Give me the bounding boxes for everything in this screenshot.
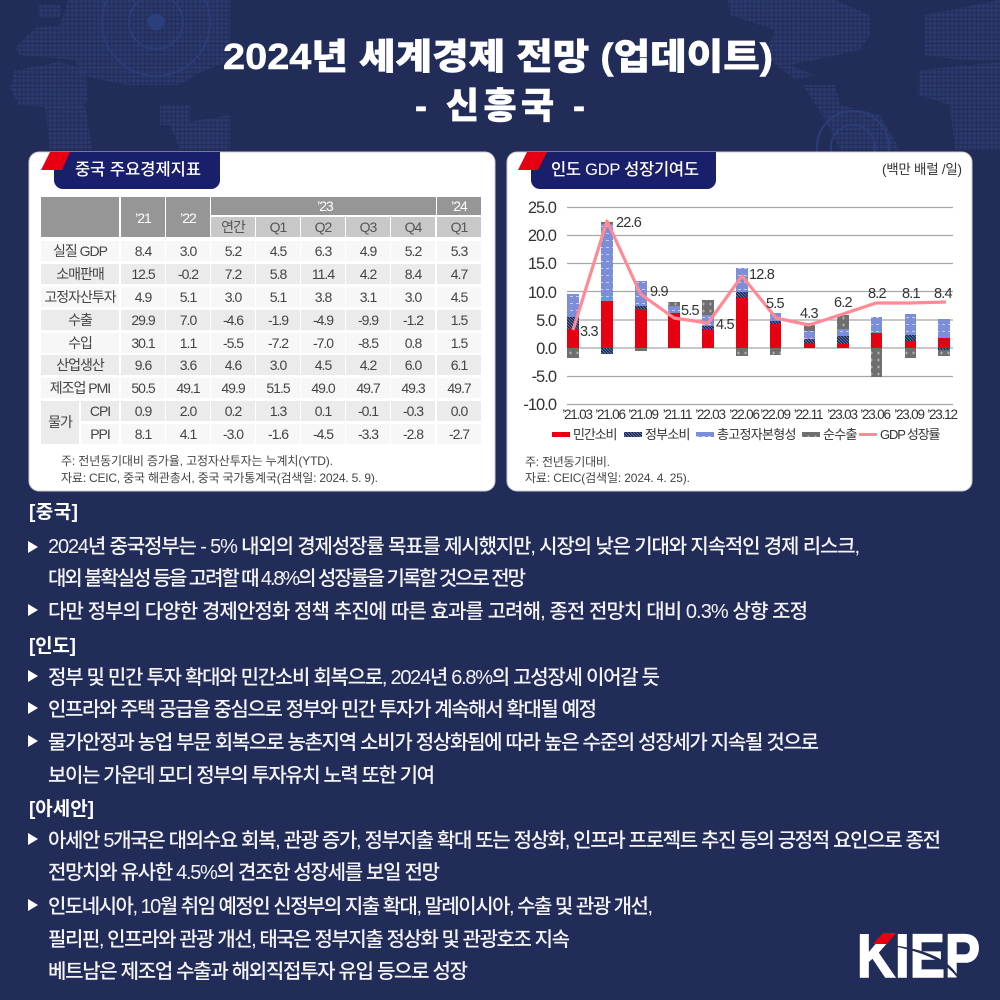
panel: India GDP contribution (507, 152, 972, 491)
x axis labels: ’21.06 (595, 407, 625, 422)
row: CPI: 1.3 (270, 403, 287, 419)
row: manufacturing PMI: 51.5 (266, 380, 291, 396)
bullet: ASEAN countries: 인도네시아, 10월 취임 예정인 신정부의 지출 확대, 말레이시아, 수출 및 관광 개선, (48, 895, 653, 918)
value labels: 4.5 (716, 317, 734, 333)
y axis gridlines and labels: 20.0 (528, 227, 557, 245)
x axis labels (562, 407, 957, 422)
row: PPI: -3.3 (358, 426, 379, 442)
bullet: India consumption: 물가안정과 농업 부문 회복으로 농촌지역 소비가 정상화됨에 따라 높은 수준의 성장세가 지속될 것으로 (48, 731, 819, 754)
value labels: 3.3 (580, 324, 598, 340)
row: real GDP: 5.2 (405, 243, 422, 259)
bars (567, 222, 950, 377)
section: India outlook: [인도] (29, 635, 76, 657)
row: industrial production: 6.1 (451, 357, 468, 373)
row: real GDP (41, 241, 481, 261)
x axis labels: ’22.06 (729, 407, 759, 422)
value labels: 9.9 (650, 284, 668, 300)
row: manufacturing PMI: 50.5 (131, 380, 156, 396)
row: industrial production: 4.5 (315, 357, 332, 373)
y axis gridlines and labels (523, 199, 953, 414)
y axis gridlines and labels: 25.0 (528, 199, 557, 217)
panel heading: India (518, 152, 716, 189)
row: manufacturing PMI: 49.9 (221, 380, 246, 396)
bullet: ASEAN countries: 베트남은 제조업 수출과 해외직접투자 유입 등으로 성장 (48, 960, 468, 983)
row: imports: -7.2 (268, 335, 289, 351)
row: industrial production: 3.6 (180, 357, 197, 373)
row: imports: -8.5 (358, 335, 379, 351)
table header: ’24 (451, 198, 468, 214)
row: exports: -4.6 (223, 312, 244, 328)
row: manufacturing PMI: 제조업 PMI (50, 380, 110, 396)
row: imports: 1.1 (180, 335, 197, 351)
value labels (580, 215, 952, 340)
row: PPI: -1.6 (268, 426, 289, 442)
row: real GDP: 4.9 (360, 243, 377, 259)
row: imports: -5.5 (223, 335, 244, 351)
row: fixed asset investment: 3.8 (315, 289, 332, 305)
y axis gridlines and labels: 10.0 (528, 284, 557, 302)
row: real GDP: 3.0 (180, 243, 197, 259)
legend (552, 427, 941, 442)
row: CPI: CPI (90, 403, 110, 419)
row: industrial production: 9.6 (135, 357, 152, 373)
bullet: ASEAN countries (28, 895, 653, 983)
value labels: 5.5 (681, 303, 699, 319)
title (223, 36, 773, 126)
legend: 순수출 (823, 427, 858, 442)
row: imports: 1.5 (451, 335, 468, 351)
row: real GDP: 4.5 (270, 243, 287, 259)
panel heading: China: 중국 주요경제지표 (75, 160, 201, 179)
row: imports: 30.1 (131, 335, 156, 351)
row: PPI: -2.7 (449, 426, 470, 442)
row: real GDP: 6.3 (315, 243, 332, 259)
row: fixed asset investment (41, 287, 481, 307)
row: industrial production (41, 355, 481, 375)
legend: GDP 성장률 (880, 427, 941, 442)
notes: China (61, 454, 378, 485)
value labels: 8.2 (868, 286, 886, 302)
row: fixed asset investment: 5.1 (270, 289, 287, 305)
table header (41, 197, 481, 237)
title: 2024년 세계경제 전망 (업데이트) (223, 36, 773, 77)
notes: India: 자료: CEIC(검색일: 2024. 4. 25). (525, 471, 690, 485)
row: CPI: 0.0 (451, 403, 468, 419)
value labels: 12.8 (749, 267, 775, 283)
bullet: India investment: 인프라와 주택 공급을 중심으로 정부와 민간 투자가 계속해서 확대될 예정 (48, 698, 597, 721)
value labels: 8.1 (902, 286, 920, 302)
x axis labels: ’22.09 (760, 407, 790, 422)
table header: Q4 (405, 219, 423, 235)
row: fixed asset investment: 3.0 (225, 289, 242, 305)
table header: ’21 (135, 210, 152, 226)
row: PPI: 8.1 (135, 426, 152, 442)
x axis labels: ’23.09 (894, 407, 924, 422)
row: fixed asset investment: 4.9 (135, 289, 152, 305)
row: CPI: 0.1 (315, 403, 332, 419)
section: ASEAN outlook: [아세안] (29, 798, 94, 820)
table column separators (79, 241, 437, 444)
notes: China: 자료: CEIC, 중국 해관총서, 중국 국가통계국(검색일: 2024. 5. 9). (61, 471, 378, 485)
row: exports: -9.9 (358, 312, 379, 328)
row: fixed asset investment: 5.1 (180, 289, 197, 305)
bullet: ASEAN-5 outlook: 아세안 5개국은 대외수요 회복, 관광 증가, 정부지출 확대 또는 정상화, 인프라 프로젝트 추진 등의 긍정적 요인으로 종전 (48, 829, 941, 852)
row: retail sales: -0.2 (178, 266, 199, 282)
section: China outlook (28, 502, 860, 623)
bullet: ASEAN-5 outlook (28, 829, 941, 884)
row: retail sales: 12.5 (131, 266, 156, 282)
row: PPI (41, 401, 481, 444)
bullet: India growth: 정부 및 민간 투자 확대와 민간소비 회복으로, 2024년 6.8%의 고성장세 이어갈 듯 (48, 666, 660, 689)
x axis labels: ’22.03 (695, 407, 725, 422)
row: exports: 29.9 (131, 312, 156, 328)
legend: 정부소비 (645, 427, 690, 442)
row: real GDP: 5.3 (451, 243, 468, 259)
value labels: 22.6 (616, 215, 642, 231)
row: PPI: PPI (90, 426, 110, 442)
row: CPI: 0.2 (225, 403, 242, 419)
x axis labels: ’21.09 (628, 407, 658, 422)
row: imports: 0.8 (405, 335, 422, 351)
row: exports (41, 310, 481, 330)
row: exports: -1.2 (403, 312, 424, 328)
row: industrial production: 3.0 (270, 357, 287, 373)
row: imports: 수입 (68, 335, 92, 351)
x axis labels: ’21.11 (663, 407, 692, 422)
bullet: China target: 2024년 중국정부는 - 5% 내외의 경제성장률 목표를 제시했지만, 시장의 낮은 기대와 지속적인 경제 리스크, (48, 535, 860, 558)
table header: Q1 (270, 219, 288, 235)
row: real GDP: 5.2 (225, 243, 242, 259)
row: PPI: 4.1 (180, 426, 197, 442)
row: retail sales: 4.2 (360, 266, 377, 282)
row: PPI: -3.0 (223, 426, 244, 442)
row: industrial production: 4.6 (225, 357, 242, 373)
row: fixed asset investment: 3.1 (360, 289, 377, 305)
section: India outlook (28, 635, 819, 787)
row: exports: -1.9 (268, 312, 289, 328)
row: retail sales: 11.4 (312, 266, 335, 282)
row: exports: 1.5 (451, 312, 468, 328)
legend: 총고정자본형성 (717, 427, 796, 442)
bullet: ASEAN-5 outlook: 전망치와 유사한 4.5%의 견조한 성장세를 보일 전망 (48, 861, 440, 884)
row: retail sales (41, 264, 481, 284)
row: retail sales: 소매판매 (56, 266, 104, 282)
GDP growth line (573, 221, 946, 330)
row: CPI: -0.1 (358, 403, 379, 419)
x axis labels: ’21.03 (562, 407, 592, 422)
chart: stacked bars with GDP line (523, 199, 957, 442)
value labels: 6.2 (834, 295, 852, 311)
row: CPI: -0.3 (403, 403, 424, 419)
row: manufacturing PMI: 49.7 (356, 380, 381, 396)
table header: ’23 (317, 198, 334, 214)
logo: KIEP: KIEP (857, 922, 980, 990)
value labels: 8.4 (934, 286, 952, 302)
y axis gridlines and labels: 15.0 (528, 255, 557, 273)
row: exports: -4.9 (313, 312, 334, 328)
row: real GDP: 8.4 (135, 243, 152, 259)
row: manufacturing PMI: 49.7 (447, 380, 472, 396)
bullet: India consumption: 보이는 가운데 모디 정부의 투자유치 노력 또한 기여 (48, 764, 435, 787)
title: - 신흥국 - (415, 85, 585, 126)
unit label: (백만 배럴 /일) (882, 162, 962, 177)
row: retail sales: 4.7 (451, 266, 468, 282)
row: fixed asset investment: 4.5 (451, 289, 468, 305)
bullet: ASEAN countries: 필리핀, 인프라와 관광 개선, 태국은 정부지출 정상화 및 관광호조 지속 (48, 928, 570, 951)
row: real GDP: 실질 GDP (53, 243, 108, 259)
row: CPI (41, 401, 481, 421)
row: fixed asset investment: 3.0 (405, 289, 422, 305)
row: manufacturing PMI: 49.1 (176, 380, 201, 396)
panel heading: India: 인도 GDP 성장기여도 (551, 160, 699, 179)
row: imports (41, 333, 481, 353)
row: exports: 수출 (68, 312, 93, 328)
table header: 연간 (221, 219, 246, 235)
row: PPI: -2.8 (403, 426, 424, 442)
x axis labels: ’23.12 (927, 407, 957, 422)
notes: India (525, 455, 690, 485)
notes: China: 주: 전년동기대비 증가율, 고정자산투자는 누계치(YTD). (61, 454, 333, 468)
row: manufacturing PMI (41, 378, 481, 398)
row: retail sales: 5.8 (270, 266, 287, 282)
panel heading: China (41, 152, 220, 189)
notes: India: 주: 전년동기대비. (525, 455, 610, 469)
y axis gridlines and labels: -5.0 (532, 368, 557, 386)
row: manufacturing PMI: 49.3 (401, 380, 426, 396)
row: CPI: 0.9 (135, 403, 152, 419)
value labels: 4.3 (800, 306, 818, 322)
bullet: China revision: 다만 정부의 다양한 경제안정화 정책 추진에 따른 효과를 고려해, 종전 전망치 대비 0.3% 상향 조정 (48, 600, 808, 623)
table header: Q2 (315, 219, 333, 235)
table header: Q3 (360, 219, 378, 235)
row: imports: -7.0 (313, 335, 334, 351)
x axis labels: ’23.03 (827, 407, 857, 422)
legend: 민간소비 (573, 427, 617, 442)
row: retail sales: 8.4 (405, 266, 422, 282)
row: CPI: 2.0 (180, 403, 197, 419)
section: ASEAN outlook (28, 798, 941, 983)
world map dot texture (10, 0, 1000, 183)
x axis labels: ’23.06 (860, 407, 890, 422)
y axis gridlines and labels: 5.0 (536, 312, 557, 330)
row: industrial production: 산업생산 (56, 357, 105, 373)
section: China outlook: [중국] (29, 502, 78, 523)
x axis labels: ’22.11 (794, 407, 823, 422)
bullet: China target (28, 535, 860, 590)
panel: China economic indicators (29, 152, 495, 491)
row: exports: 7.0 (180, 312, 197, 328)
row: industrial production: 6.0 (405, 357, 422, 373)
y axis gridlines and labels: 0.0 (536, 340, 557, 358)
table header: Q1 (451, 219, 469, 235)
row: PPI: -4.5 (313, 426, 334, 442)
row: fixed asset investment: 고정자산투자 (44, 289, 117, 305)
row: PPI: 물가 (48, 414, 73, 430)
row: industrial production: 4.2 (360, 357, 377, 373)
table header: ’22 (180, 210, 197, 226)
bullet: China target: 대외 불확실성 등을 고려할 때 4.8%의 성장률을 기록할 것으로 전망 (48, 567, 526, 590)
bullet: India consumption (28, 731, 819, 787)
row: manufacturing PMI: 49.0 (311, 380, 336, 396)
value labels: 5.5 (766, 296, 784, 312)
y axis gridlines and labels: -10.0 (523, 396, 557, 414)
row: retail sales: 7.2 (225, 266, 242, 282)
